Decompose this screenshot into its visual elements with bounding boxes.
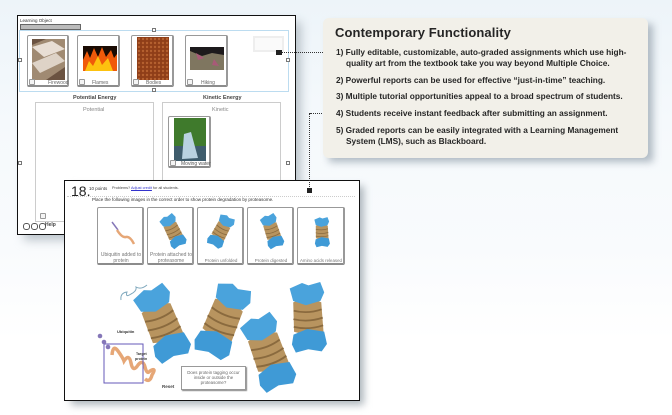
diagram: proteasome sequence: protein [135, 357, 147, 361]
shadow: upper window [24, 22, 301, 240]
list items: System (LMS), such as Blackboard. [346, 136, 486, 146]
ubiquitin chain [98, 334, 102, 338]
list items: 5) Graded reports can be easily integrated with a Learning Management [336, 125, 618, 135]
card: flames [77, 35, 120, 87]
list items: 1) Fully editable, customizable, auto-graded assignments which use high- [336, 47, 626, 57]
card: protein attached [147, 207, 194, 265]
heading: potential energy: Potential Energy [73, 95, 116, 101]
instructions: Place the following images in the correct order to show protein degradation by proteasome. [92, 197, 273, 202]
card: moving water: Moving water [181, 161, 211, 167]
label: learning object: Learning Object [20, 18, 52, 23]
card: protein unfolded [197, 207, 244, 265]
callout: protein tagging question [181, 366, 246, 390]
list items [336, 47, 626, 146]
points: 10 points [89, 186, 107, 191]
card: moving water [168, 116, 211, 168]
window: protein question [64, 180, 360, 401]
card: amino acids released: Amino acids released [300, 258, 342, 263]
proteasome 1 [130, 281, 194, 365]
dropdown [20, 24, 81, 30]
drop zone: potential [35, 102, 154, 222]
selection box [104, 344, 143, 383]
target protein [112, 348, 154, 380]
list items: 4) Students receive instant feedback after submitting an assignment. [336, 108, 608, 118]
drop zone: kinetic: Kinetic [212, 107, 229, 113]
drop zone: potential: Potential [83, 107, 104, 113]
ghost button: ready [253, 36, 284, 52]
card: ubiquitin added: Ubiquitin added to protein [101, 252, 141, 264]
panel shadow [329, 24, 653, 162]
sketch: faint annotation [121, 285, 147, 300]
card: hiking: Hiking [201, 80, 215, 86]
diagram: proteasome sequence: Target [136, 352, 148, 356]
card: flames: Flames [92, 80, 108, 86]
heading: kinetic energy: Kinetic Energy [203, 95, 242, 101]
panel: contemporary functionality [323, 18, 648, 158]
card: protein unfolded: Protein unfolded [205, 258, 237, 263]
card: bodies: Bodies [146, 80, 161, 86]
list items: 3) Multiple tutorial opportunities appeal to a broad spectrum of students. [336, 91, 623, 101]
selection frame [19, 30, 289, 92]
connector: item 4 to lower window [310, 113, 336, 114]
connector: item 1 to upper window [276, 50, 282, 55]
shadow: lower window [71, 186, 364, 405]
card: protein attached: Protein attached to proteasome [150, 252, 192, 264]
question number: 18. [71, 183, 90, 199]
frame handles [18, 28, 290, 165]
proteasome 4 [289, 282, 327, 353]
card: amino acids released [297, 207, 345, 265]
proteasome 3 [237, 311, 299, 394]
window: learning object [17, 15, 296, 235]
card: protein digested: Protein digested [255, 258, 287, 263]
diagram: proteasome sequence [98, 282, 327, 393]
playback controls [23, 223, 46, 230]
diagram: proteasome sequence: Reset [162, 384, 175, 389]
drop zone: kinetic [162, 102, 281, 222]
panel heading: Contemporary Functionality [335, 25, 511, 40]
card: hiking [185, 35, 228, 87]
help link: Help [45, 222, 56, 228]
diagram: proteasome sequence: Ubiquitin [117, 329, 135, 334]
proteasome 2 [191, 278, 255, 362]
card: bodies [131, 35, 174, 87]
problem link: Problems? Adjust credit for all students. [112, 186, 179, 190]
card: firewood: Firewood [48, 80, 69, 86]
list items: quality art from the textbook take you way beyond Multiple Choice. [346, 58, 610, 68]
callout: protein tagging question: Does protein tagging occur inside or outside the proteasome? [187, 370, 240, 385]
card: firewood [27, 35, 69, 87]
card: ubiquitin added [97, 207, 144, 265]
list items: 2) Powerful reports can be used for effective “just-in-time” teaching. [336, 75, 605, 85]
card: protein digested [247, 207, 294, 265]
